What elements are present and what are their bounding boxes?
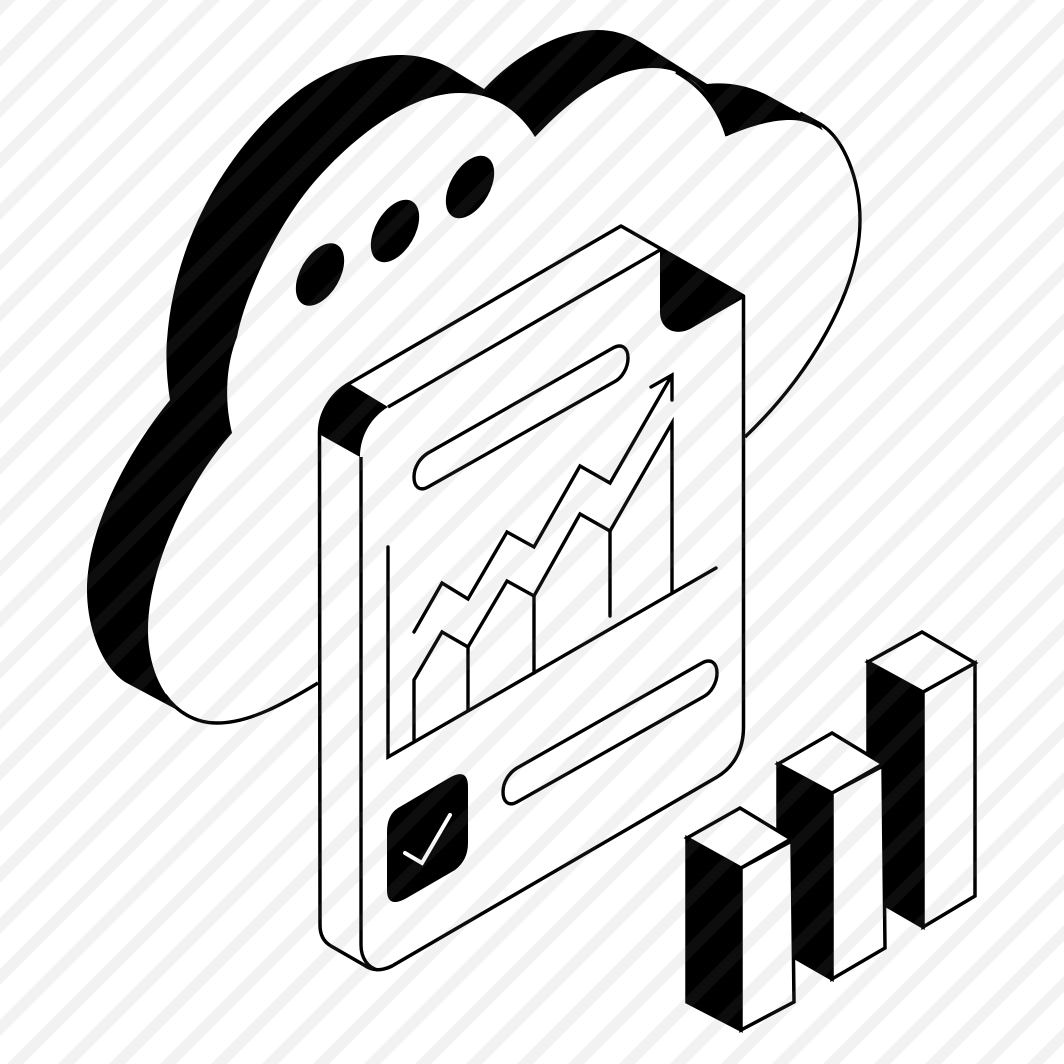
document body [320, 226, 744, 970]
trend arrow [414, 375, 672, 632]
cloud front face [148, 68, 860, 723]
cloud extruded black side [87, 30, 860, 713]
cloud front outline [165, 72, 860, 723]
short bar [687, 808, 794, 1030]
middle bar [778, 733, 885, 979]
cloud [87, 30, 860, 723]
black corner top left [319, 384, 388, 457]
chart drop lines [468, 531, 610, 710]
chart area line [414, 423, 672, 740]
black corner top right [660, 250, 744, 332]
bar chart icon [687, 632, 975, 1030]
three dots [286, 148, 504, 314]
report document [319, 226, 744, 970]
line chart [388, 375, 716, 757]
tall bar [868, 632, 975, 927]
top pill [414, 346, 628, 489]
chart axes [388, 547, 716, 757]
document front edges [361, 250, 660, 970]
bottom pill [503, 661, 717, 804]
checkbox icon [387, 774, 468, 902]
